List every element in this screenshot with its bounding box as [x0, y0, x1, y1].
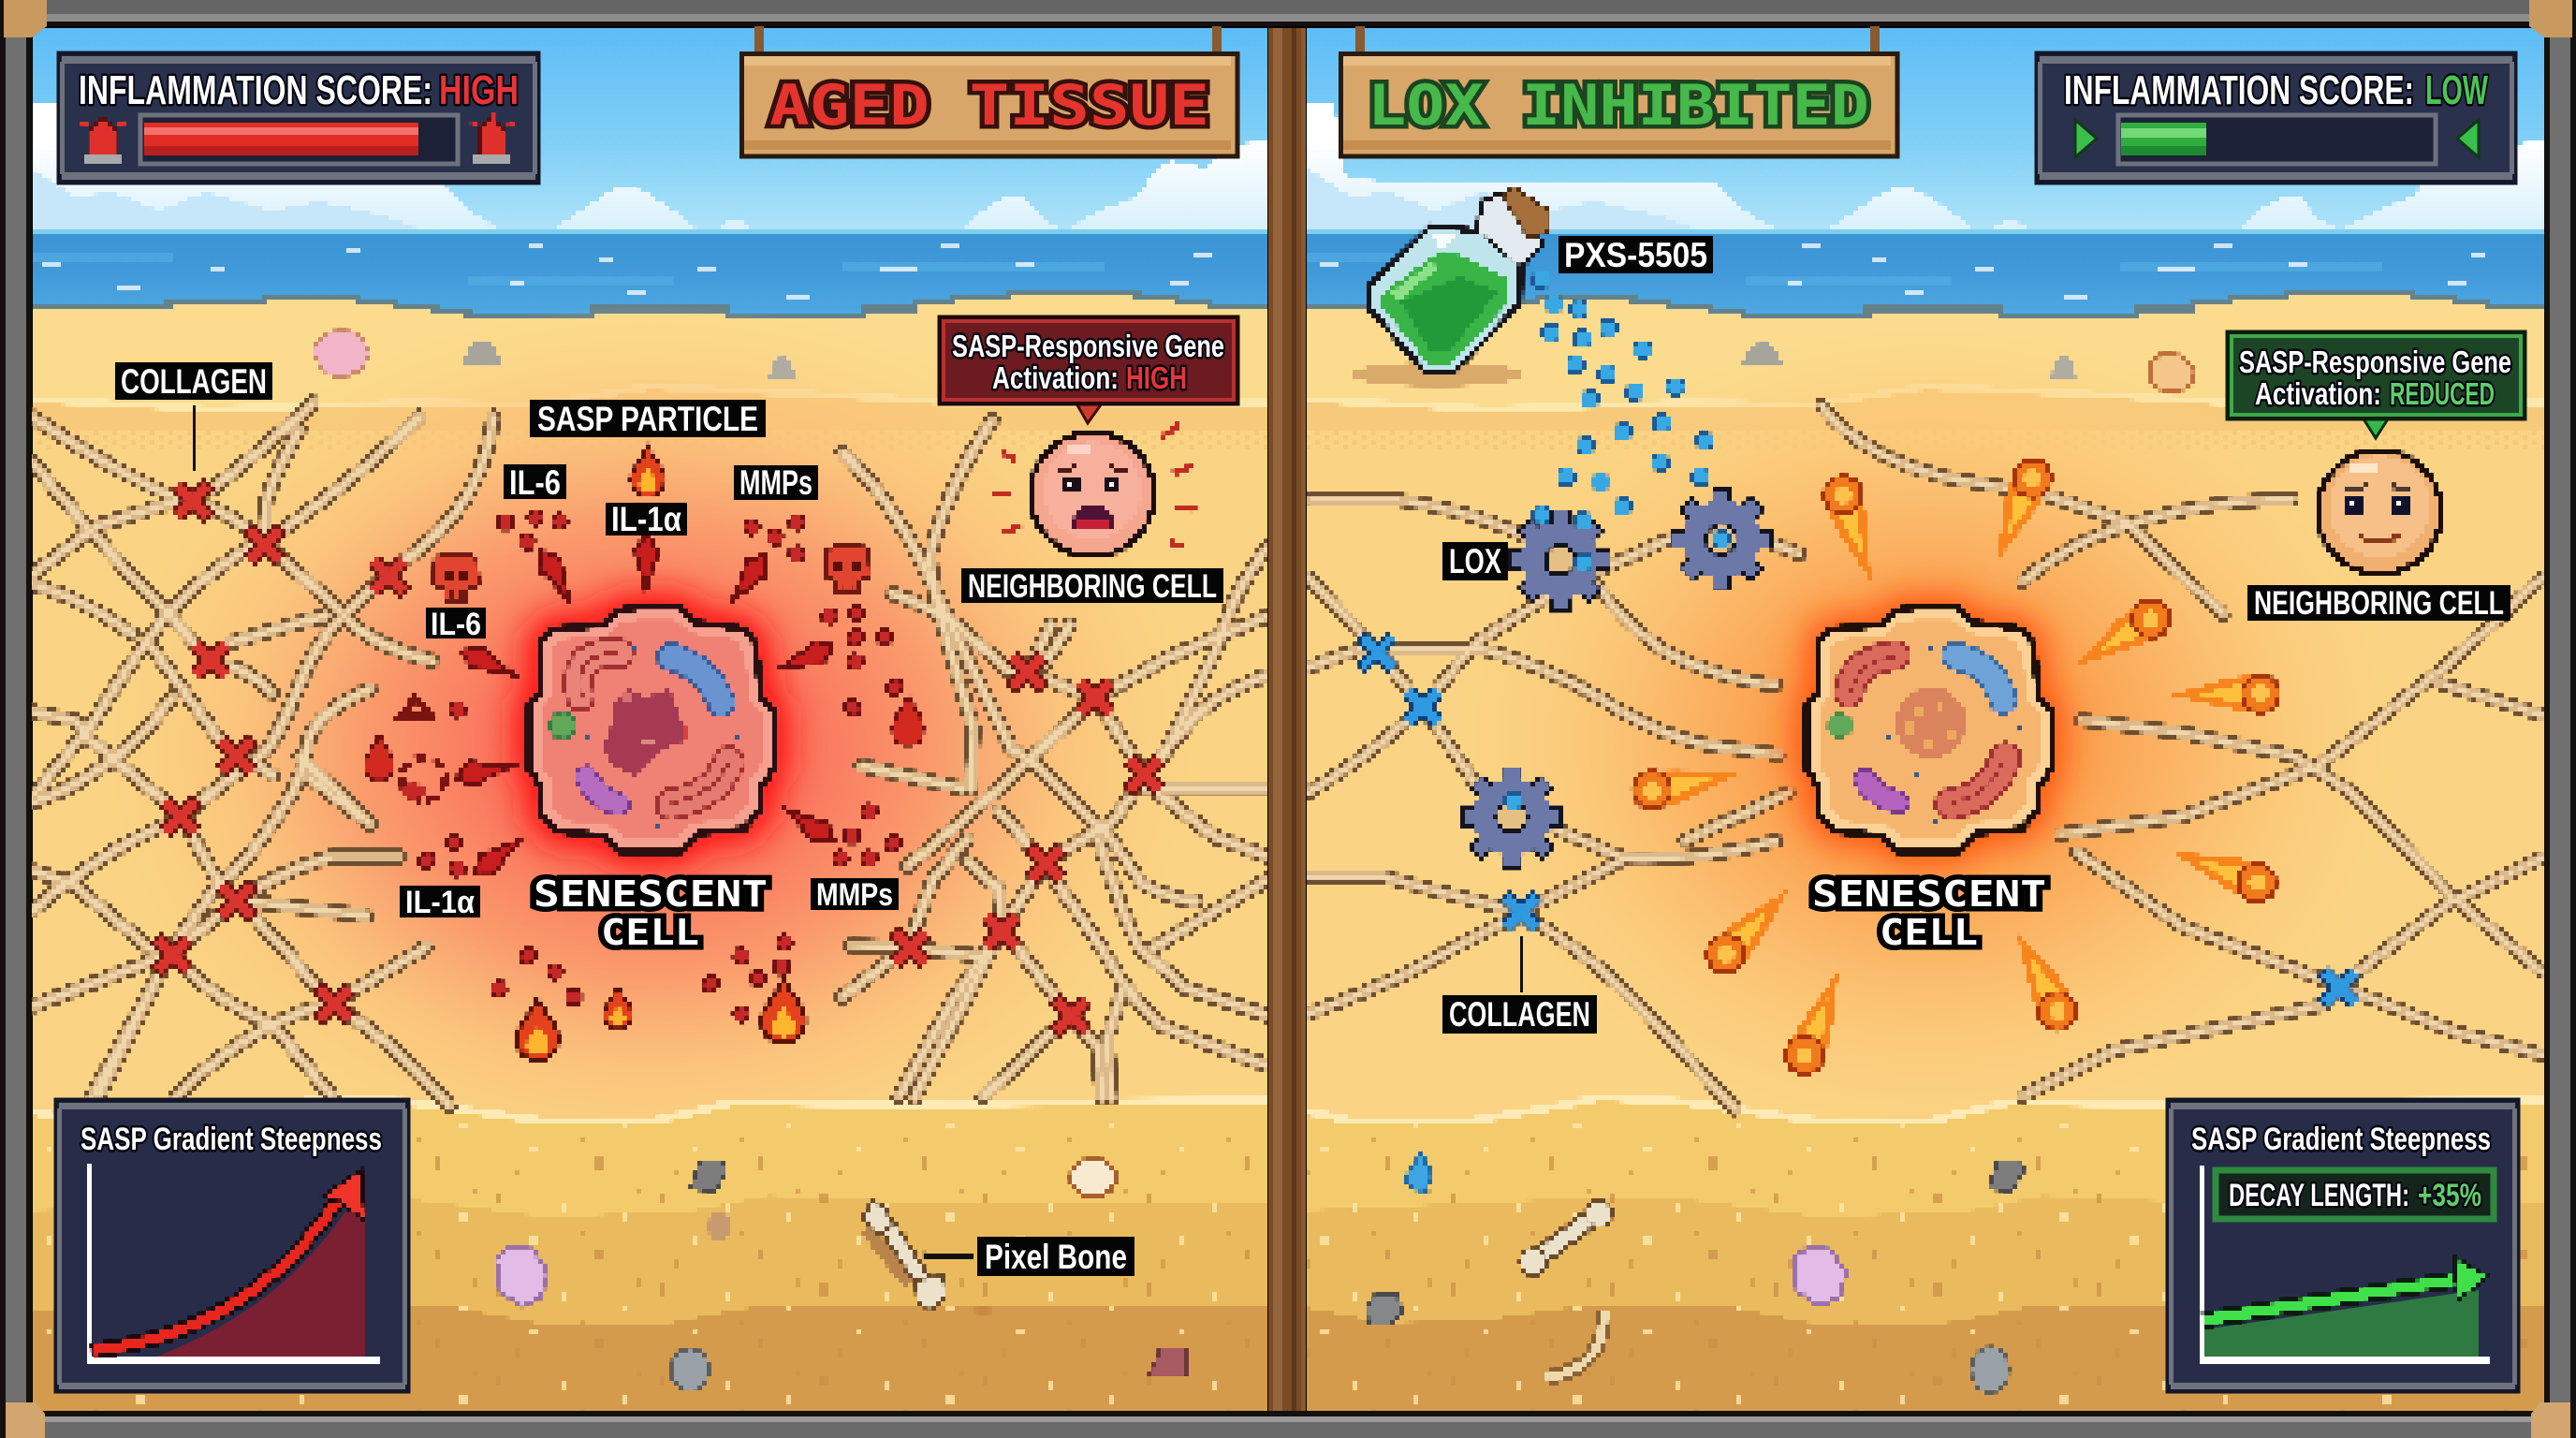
- wood corner top left: [4, 0, 47, 37]
- decay length badge: +35%: [2418, 1178, 2481, 1213]
- chart frame: [56, 1100, 408, 1391]
- callout value: HIGH: [1126, 360, 1187, 395]
- scene background: aged tissue beach: [33, 28, 1267, 1119]
- lox enzyme gears: [1462, 490, 1771, 867]
- sand decorations: shells, rocks: [313, 330, 1187, 1390]
- label: senescent cell: [1812, 873, 2046, 953]
- wood corner bottom right: [2531, 1402, 2570, 1438]
- sign board: [741, 54, 1236, 154]
- cell body and organelles: [1807, 608, 2052, 852]
- label: pxs-5505: PXS-5505: [1564, 236, 1707, 274]
- wood corner top right: [2529, 0, 2572, 37]
- callout text line 2: Activation:: [2255, 376, 2381, 411]
- label: neighboring cell: NEIGHBORING CELL: [968, 568, 1217, 605]
- chart panel: sasp gradient steep: [56, 1100, 408, 1391]
- label: il-6 second: IL-6: [431, 607, 481, 642]
- arrow icon right: [2457, 120, 2479, 157]
- label: senescent cell: SENESCENT: [534, 873, 768, 915]
- chart axes: [2200, 1166, 2490, 1364]
- alarm icon right: [470, 110, 515, 163]
- reduced glow: [1442, 328, 2415, 1152]
- sign posts: [754, 26, 1222, 56]
- collagen fibres, damaged: [32, 403, 1268, 1107]
- frame top: [0, 0, 2576, 26]
- red halo: [529, 608, 774, 852]
- decay length badge: [2216, 1170, 2494, 1219]
- chart panel: sasp gradient flat: [2168, 1100, 2518, 1391]
- score label: INFLAMMATION SCORE:: [79, 67, 432, 113]
- panel: lox inhibited: [1308, 26, 2549, 1414]
- pixel bone: [863, 1201, 945, 1311]
- sign title: AGED TISSUE: [769, 73, 1209, 139]
- score value: HIGH: [439, 67, 519, 113]
- chart axes: [87, 1164, 380, 1364]
- label: senescent cell: CELL: [1880, 912, 1978, 953]
- wood corner bottom left: [6, 1402, 45, 1438]
- cut marks on collagen: [155, 485, 1160, 1032]
- callout value: REDUCED: [2390, 376, 2495, 411]
- chart area fill: [2203, 1290, 2479, 1357]
- label: senescent cell: CELL: [601, 912, 699, 953]
- widget frame: [2037, 53, 2515, 183]
- callout text line 2: Activation:: [992, 360, 1119, 395]
- cell body and organelles: [529, 608, 774, 852]
- callout: gene activation reduced: [2228, 332, 2525, 438]
- inflammation score widget: low: [2037, 53, 2515, 183]
- callout box: [940, 317, 1237, 423]
- score value: LOW: [2425, 67, 2488, 113]
- sign posts: [1355, 26, 1880, 56]
- leader line: collagen: [1520, 936, 1523, 992]
- sasp particles: [365, 447, 923, 1061]
- label: mmps second: MMPs: [816, 877, 893, 913]
- label: il-1 alpha second: IL-1α: [405, 885, 475, 920]
- inflammation score widget: high: [59, 53, 538, 183]
- collagen crosslink marks: [1361, 637, 2355, 1004]
- sign: lox inhibited: [1339, 26, 1895, 154]
- senescent cell, aged: [529, 608, 774, 852]
- falling inhibitor particles: [1505, 271, 1730, 810]
- panel: aged tissue: [32, 26, 1273, 1414]
- alarm icon left: [80, 110, 125, 163]
- callout text: SASP-Responsive Gene: [952, 329, 1224, 363]
- collagen fibres, intact: [1308, 405, 2543, 1109]
- label: pixel bone: Pixel Bone: [985, 1238, 1127, 1276]
- orange halo: [1807, 608, 2052, 852]
- callout: gene activation high: [940, 317, 1237, 423]
- lower sand bands: [1308, 1097, 2549, 1414]
- neighboring cell, calm: [2318, 450, 2441, 574]
- chart curve arrow: [92, 1170, 365, 1351]
- label: collagen: COLLAGEN: [1449, 995, 1590, 1034]
- label: lox: LOX: [1449, 542, 1501, 580]
- frame bottom: [0, 1411, 2576, 1438]
- wooden center divider: [1266, 26, 1308, 1412]
- callout box: [2228, 332, 2525, 438]
- lower sand bands: [32, 1097, 1273, 1414]
- chart line arrow: [2203, 1257, 2487, 1320]
- frame left: [0, 0, 32, 1438]
- label: mmps: MMPs: [739, 463, 812, 502]
- chart title: SASP Gradient Steepness: [2191, 1122, 2491, 1157]
- chart frame: [2168, 1100, 2518, 1391]
- score bar: [2118, 115, 2436, 164]
- label: il-6: IL-6: [509, 463, 561, 502]
- label: collagen: COLLAGEN: [121, 362, 267, 401]
- sand decorations: rocks, shells, bones: [1367, 341, 2195, 1392]
- inflammation glow: [185, 313, 1116, 1112]
- sasp comets: [1631, 454, 2281, 1079]
- frame right: [2544, 0, 2576, 1438]
- widget frame: [59, 53, 538, 183]
- chart area fill: [154, 1208, 365, 1357]
- label: sasp particle: SASP PARTICLE: [537, 400, 758, 438]
- potion bottle: pxs-5505: [1351, 187, 1548, 387]
- label: senescent cell: [534, 873, 768, 953]
- sign board: [1339, 54, 1895, 154]
- arrow icon left: [2075, 120, 2097, 157]
- leader line: pixel bone: [924, 1254, 973, 1259]
- decay length badge: DECAY LENGTH:: [2229, 1178, 2409, 1213]
- score bar: [140, 115, 458, 164]
- scene background: lox inhibited beach: [1307, 28, 2544, 1119]
- score label: INFLAMMATION SCORE:: [2064, 67, 2414, 113]
- pixel bone: [1520, 1200, 1612, 1275]
- label: neighboring cell: NEIGHBORING CELL: [2254, 585, 2504, 622]
- chart title: SASP Gradient Steepness: [80, 1122, 382, 1157]
- sign: aged tissue: [741, 26, 1236, 154]
- leader line: collagen: [193, 405, 196, 471]
- sign title: LOX INHIBITED: [1368, 73, 1869, 139]
- label: il-1 alpha: IL-1α: [611, 500, 681, 538]
- neighboring cell, distressed: [990, 421, 1196, 556]
- senescent cell, inhibited: [1807, 608, 2052, 852]
- label: senescent cell: SENESCENT: [1812, 873, 2046, 915]
